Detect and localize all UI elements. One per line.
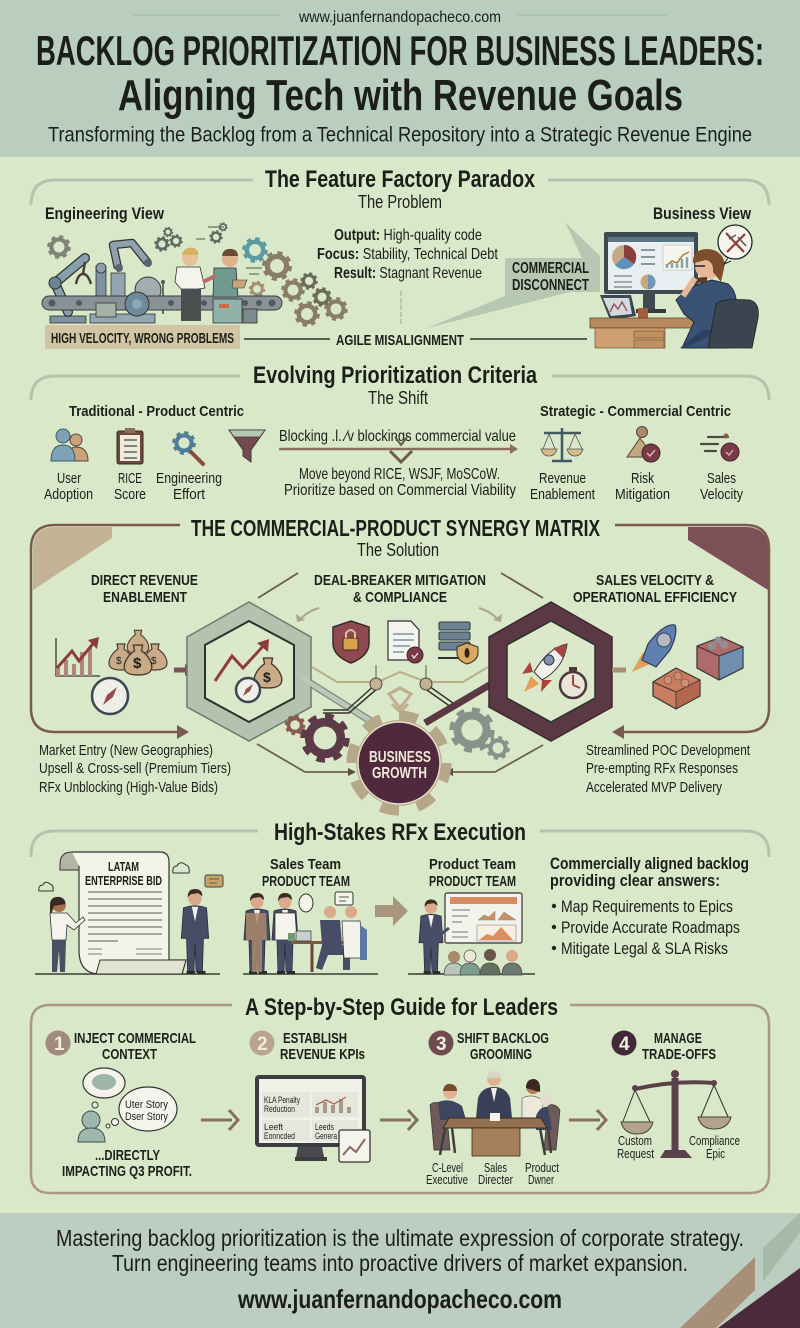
label: sales velocity: Sales <box>707 470 736 487</box>
step 3: C-Level <box>432 1160 463 1175</box>
column title: sales velocity: OPERATIONAL EFFICIENCY <box>573 589 737 606</box>
label: sales team: Sales Team <box>270 856 341 873</box>
column title: deal breaker mitigation: & COMPLIANCE <box>353 589 447 606</box>
footer website url: www.juanfernandopacheco.com <box>237 1284 562 1314</box>
heading: synergy matrix: THE COMMERCIAL-PRODUCT SYNERGY MATRIX <box>191 515 600 541</box>
illustration: product team presentation <box>419 893 522 975</box>
bar: right hexagon to growth <box>425 680 498 723</box>
label: risk mitigation: Mitigation <box>615 486 670 503</box>
column title: deal breaker mitigation: DEAL-BREAKER MITIGATION <box>314 572 486 589</box>
heading: feature factory paradox: The Feature Factory Paradox <box>265 166 536 193</box>
text: move beyond frameworks: Move beyond RICE, WSJF, MoSCoW. <box>299 466 500 483</box>
panel: commercial product synergy matrix <box>31 515 769 809</box>
label: sales team <box>262 856 350 890</box>
closing statement <box>56 1225 744 1276</box>
panel: high-stakes rfx execution <box>31 819 769 975</box>
label: product team <box>429 856 516 890</box>
arrow: step 1 to 2 <box>201 1110 238 1130</box>
step 3: Executive <box>426 1172 468 1187</box>
label: revenue enablement <box>530 470 596 503</box>
icons: clouds and speech bubble <box>39 863 223 891</box>
icon: revenue enablement scale <box>541 428 583 461</box>
banner: high velocity wrong problems <box>45 325 240 349</box>
list: revenue outcomes: Market Entry (New Geographies) <box>39 742 213 759</box>
text: move beyond frameworks: Prioritize based on Commercial Viability <box>284 482 516 499</box>
column title: sales velocity <box>573 572 737 606</box>
text block: commercially aligned backlog: Mitigate Legal & SLA Risks <box>561 939 728 958</box>
step 4 <box>612 1030 740 1161</box>
list: revenue outcomes: RFx Unblocking (High-Value Bids) <box>39 779 218 796</box>
arrow: step 3 to 4 <box>569 1110 606 1130</box>
label: agile misalignment: AGILE MISALIGNMENT <box>336 332 464 349</box>
arrow: shift <box>279 437 518 462</box>
step 1: Uter Story <box>125 1099 168 1111</box>
step 2: Genera <box>315 1131 337 1141</box>
illustration: enterprise bid scroll <box>60 852 186 974</box>
step 2: Reduction <box>264 1104 295 1114</box>
figure: woman presenter <box>50 897 85 972</box>
label: rice score: Score <box>114 486 146 503</box>
heading: evolving prioritization criteria: Evolving Prioritization Criteria <box>253 362 538 389</box>
icon: red lego block <box>697 636 743 680</box>
icon: money bags: $ <box>133 655 142 672</box>
top website url: www.juanfernandopacheco.com <box>298 9 501 26</box>
step 4: TRADE-OFFS <box>642 1046 716 1063</box>
illustration: business leader at desk <box>590 225 758 348</box>
column title: direct revenue enablement: ENABLEMENT <box>103 589 187 606</box>
step 4: 4 <box>619 1034 630 1055</box>
step 2: ESTABLISH <box>283 1030 347 1047</box>
icon: sales velocity <box>701 434 739 461</box>
arrow: step 2 to 3 <box>380 1110 417 1130</box>
label: rice score <box>114 470 146 503</box>
node: business growth <box>353 717 445 809</box>
node: business growth: BUSINESS <box>369 749 431 766</box>
icon: orange lego block <box>653 668 700 709</box>
heading: rfx execution: High-Stakes RFx Execution <box>274 819 526 846</box>
closing statement: Turn engineering teams into proactive drivers of market expansion. <box>112 1250 688 1276</box>
list: velocity outcomes: Accelerated MVP Delivery <box>586 779 722 796</box>
icon: engineering effort <box>174 433 203 464</box>
list: velocity outcomes <box>586 742 751 796</box>
panel: the feature factory paradox <box>31 166 769 349</box>
step 1: INJECT COMMERCIAL <box>74 1030 196 1047</box>
step 4: MANAGE <box>654 1030 702 1047</box>
panel: evolving prioritization criteria <box>31 362 769 503</box>
text: blocking commercial value: Blocking .l..⁄v blockings commercial value <box>279 428 516 445</box>
callout: commercial disconnect: DISCONNECT <box>512 277 589 294</box>
step 3: Dwner <box>528 1172 554 1187</box>
heading: step-by-step guide: A Step-by-Step Guide for Leaders <box>245 994 558 1021</box>
step 3: GROOMING <box>470 1046 532 1063</box>
illustration: sales team meeting <box>244 892 367 974</box>
column title: sales velocity: SALES VELOCITY & <box>596 572 714 589</box>
arrow: sales to product <box>375 896 408 926</box>
text block: commercially aligned backlog: Commercially aligned backlog <box>550 854 749 873</box>
icon: funnel <box>229 430 265 462</box>
text block: commercially aligned backlog: Provide Accurate Roadmaps <box>561 918 740 937</box>
step 3: 3 <box>436 1034 447 1055</box>
label: sales velocity <box>700 470 743 503</box>
icon: money bags: $ <box>151 656 157 667</box>
connector lines <box>302 665 488 725</box>
column head: traditional product centric: Traditional - Product Centric <box>69 403 244 420</box>
icon: rocket <box>632 625 676 672</box>
illustration: enterprise bid scroll: ENTERPRISE BID <box>85 873 162 888</box>
label: rice score: RICE <box>118 470 142 487</box>
label: risk mitigation: Risk <box>631 470 654 487</box>
icon: secure server <box>438 622 478 664</box>
text block: output focus result: Focus: Stability, Technical Debt <box>317 246 498 263</box>
hexagon: sales velocity <box>489 602 612 741</box>
step 2: KLA Penalty <box>264 1095 300 1105</box>
column title: direct revenue enablement <box>91 572 198 606</box>
callout: commercial disconnect: COMMERCIAL <box>512 260 589 277</box>
icon: user adoption <box>51 429 88 461</box>
label: product team: PRODUCT TEAM <box>429 873 516 890</box>
label: revenue enablement: Enablement <box>530 486 596 503</box>
text block: output focus result: Output: High-quality code <box>334 227 482 244</box>
step 2: 2 <box>257 1034 268 1055</box>
label: engineering effort: Engineering <box>156 470 222 487</box>
header band <box>0 0 800 157</box>
list: velocity outcomes: Streamlined POC Development <box>586 742 751 759</box>
text block: commercially aligned backlog: Map Requirements to Epics <box>561 897 733 916</box>
step 1: ...DIRECTLY <box>95 1147 160 1164</box>
icon: risk mitigation <box>627 426 660 462</box>
icon: money bags <box>109 630 167 675</box>
decorative corner shapes <box>680 1213 800 1328</box>
step 3: Sales <box>484 1160 507 1175</box>
step 3 <box>426 1030 560 1187</box>
list: revenue outcomes: Upsell & Cross-sell (Premium Tiers) <box>39 760 231 777</box>
subheading: the problem: The Problem <box>358 192 442 212</box>
subheading: the solution: The Solution <box>357 540 439 560</box>
step 2: Eonncded <box>264 1131 295 1141</box>
label: sales velocity: Velocity <box>700 486 743 503</box>
text block: commercially aligned backlog: providing clear answers: <box>550 871 720 890</box>
list: velocity outcomes: Pre-empting RFx Responses <box>586 760 738 777</box>
step 1 <box>46 1030 196 1180</box>
banner: high velocity wrong problems: HIGH VELOCITY, WRONG PROBLEMS <box>51 330 234 347</box>
callout: commercial disconnect <box>427 222 600 328</box>
figure: man in suit <box>181 889 209 974</box>
column title: deal breaker mitigation <box>314 572 486 606</box>
step 3: Product <box>525 1160 559 1175</box>
step 2: REVENUE KPIs <box>280 1046 365 1063</box>
gears cluster <box>286 710 508 760</box>
label: user adoption <box>44 470 93 503</box>
bar: left hexagon to growth <box>302 678 377 725</box>
label: user adoption: Adoption <box>44 486 93 503</box>
label: business view: Business View <box>653 204 752 223</box>
icon: compass <box>92 678 128 714</box>
step 4: Request <box>617 1146 654 1161</box>
label: engineering effort: Effort <box>173 486 206 503</box>
step 4: Custom <box>618 1133 652 1148</box>
step 1: Dser Story <box>125 1111 168 1123</box>
label: product team: Product Team <box>429 856 516 873</box>
hexagon: revenue enablement <box>187 602 311 741</box>
label: risk mitigation <box>615 470 670 503</box>
icon: shield padlock <box>333 621 369 663</box>
column title: direct revenue enablement: DIRECT REVENUE <box>91 572 198 589</box>
step 3: Directer <box>478 1172 514 1187</box>
subheading: the shift: The Shift <box>368 388 428 408</box>
column head: strategic commercial centric: Strategic - Commercial Centric <box>540 403 731 420</box>
label: user adoption: User <box>57 470 81 487</box>
icon: money bags: $ <box>116 656 122 667</box>
list: revenue outcomes <box>39 742 231 796</box>
icon: growth chart <box>56 637 100 676</box>
text block: output focus result: Result: Stagnant Revenue <box>334 265 482 282</box>
step 3: SHIFT BACKLOG <box>457 1030 549 1047</box>
label: revenue enablement: Revenue <box>539 470 586 487</box>
text block: output focus result <box>317 227 498 282</box>
step 1: CONTEXT <box>102 1046 157 1063</box>
label: engineering view: Engineering View <box>45 204 165 223</box>
step 1: IMPACTING Q3 PROFIT. <box>62 1163 192 1180</box>
panel: step-by-step guide <box>31 994 769 1193</box>
step 2: Leeds <box>315 1122 334 1132</box>
step 4: Compliance <box>689 1133 740 1148</box>
step 2 <box>250 1030 370 1162</box>
illustration: factory line <box>42 223 346 325</box>
footer band <box>0 1213 800 1328</box>
node: business growth: GROWTH <box>372 765 427 782</box>
step 4: Epic <box>706 1146 725 1161</box>
text block: commercially aligned backlog <box>550 854 749 958</box>
illustration: enterprise bid scroll: LATAM <box>108 859 139 874</box>
step 1: 1 <box>54 1034 65 1055</box>
hexagon: revenue enablement: $ <box>263 669 271 685</box>
label: engineering effort <box>156 470 222 503</box>
icon: compliance document <box>388 621 423 663</box>
icon: rice score clipboard <box>117 428 143 464</box>
text: move beyond frameworks <box>284 466 516 499</box>
step 2: Leeft <box>264 1122 283 1132</box>
label: sales team: PRODUCT TEAM <box>262 873 350 890</box>
